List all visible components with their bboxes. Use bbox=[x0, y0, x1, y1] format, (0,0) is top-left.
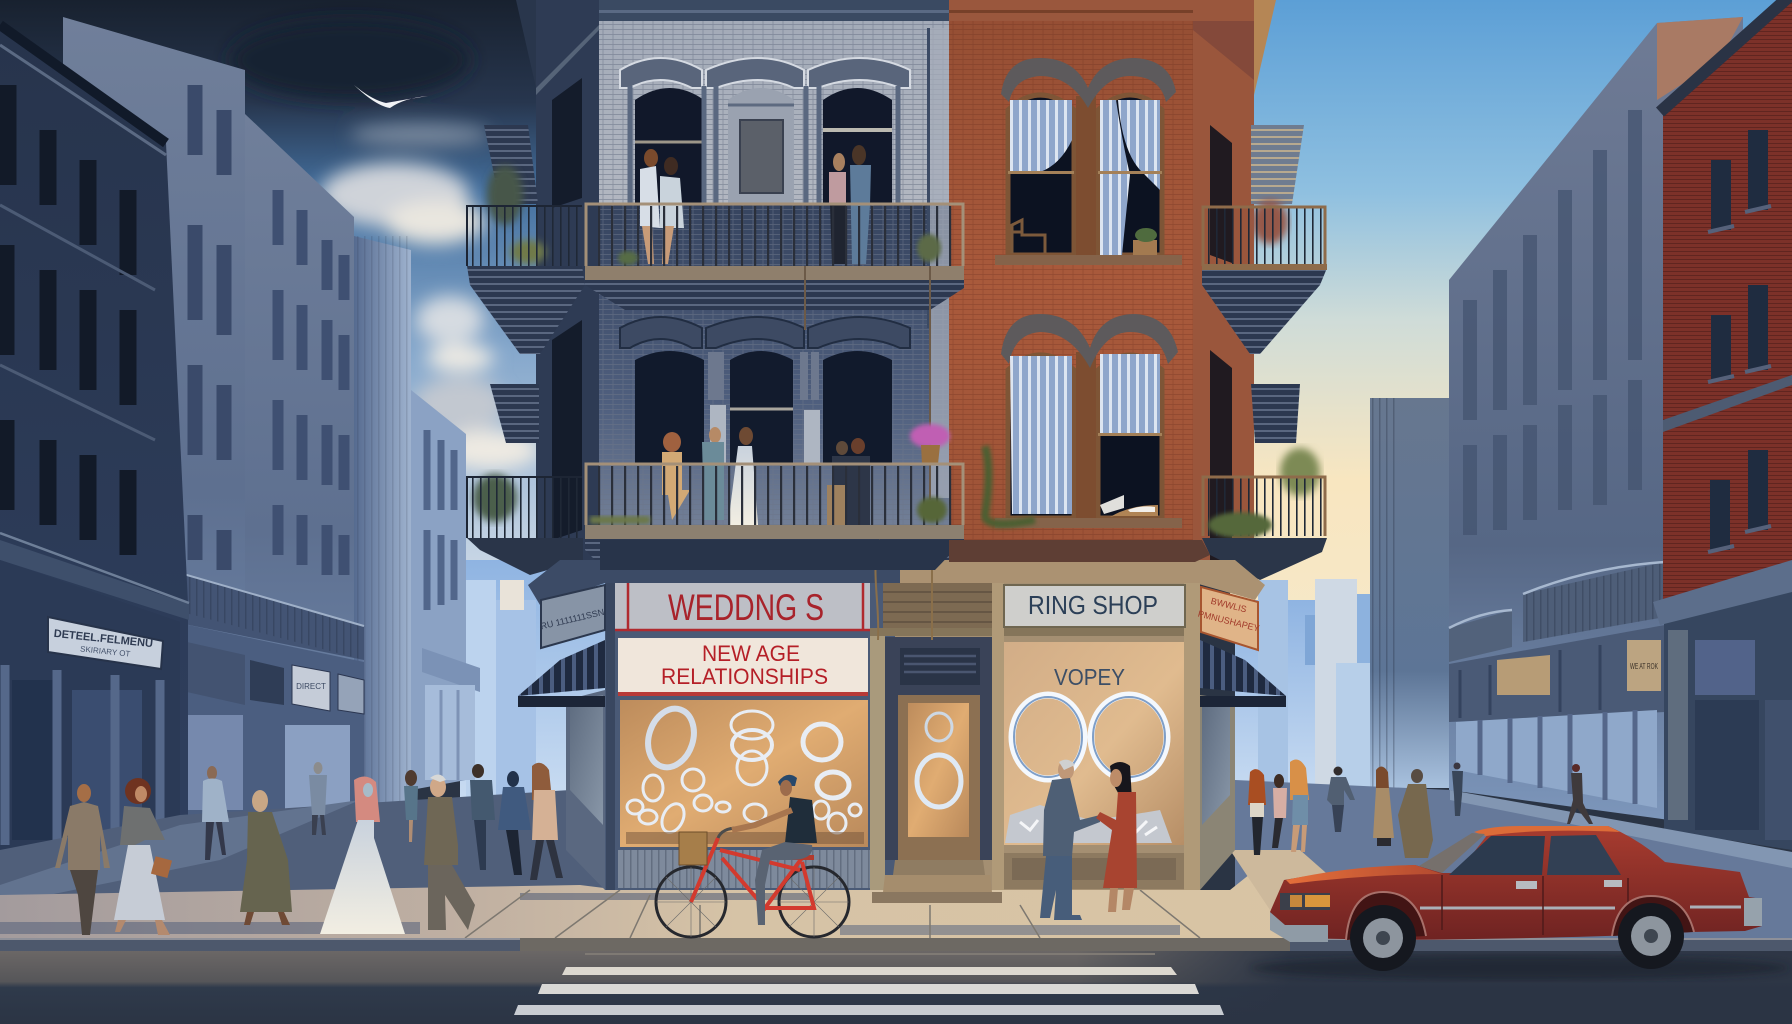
couple right bbox=[829, 145, 871, 264]
cornice right bbox=[900, 560, 1265, 600]
sign: weddings bbox=[615, 583, 870, 630]
bicycle bbox=[656, 828, 849, 937]
car: red sedan bbox=[1250, 826, 1790, 980]
person: curly woman bbox=[114, 778, 172, 935]
mid building left C bbox=[245, 114, 354, 810]
person: hooded bbox=[498, 771, 531, 875]
icon: chair bbox=[1012, 220, 1045, 253]
gray upper door bbox=[728, 88, 794, 204]
window: ring shop bbox=[1004, 642, 1184, 845]
poster: torn bbox=[1497, 655, 1550, 695]
brick windows lower bbox=[985, 314, 1182, 528]
door handle front bbox=[1516, 881, 1537, 889]
person: pink top bbox=[1272, 774, 1287, 848]
person: bride bbox=[320, 776, 405, 934]
sign: old store: DETEEL.FELMENU bbox=[53, 628, 154, 650]
door handle rear bbox=[1604, 880, 1622, 887]
balcony railing bbox=[587, 466, 962, 525]
curtain lower left bbox=[1010, 356, 1072, 514]
poster: notice bbox=[1627, 640, 1661, 691]
hanging plants bbox=[985, 446, 1035, 524]
roof eaves bbox=[516, 0, 566, 88]
mid building storefront with balcony bbox=[159, 567, 364, 820]
balcony railing bbox=[587, 206, 962, 266]
rear wheel bbox=[1618, 903, 1684, 969]
person: beige coat bbox=[1373, 766, 1394, 846]
right side wall bbox=[1193, 0, 1254, 570]
mid building left B bbox=[63, 17, 245, 810]
icon: plant pot bbox=[1133, 228, 1157, 255]
person: coat bbox=[202, 766, 229, 860]
person: far dark bbox=[1452, 762, 1463, 816]
left side wall bbox=[536, 0, 599, 570]
gray upper window left bbox=[635, 88, 704, 204]
sign: left side bbox=[540, 585, 605, 648]
person: man blue jacket bbox=[470, 764, 495, 870]
hood bbox=[1286, 865, 1442, 884]
sky: stormy left bbox=[0, 0, 640, 640]
right building blue bbox=[1449, 17, 1743, 830]
side fire escape lower right bbox=[1202, 384, 1327, 580]
door steps bbox=[872, 860, 1002, 903]
person: old woman robe bbox=[240, 790, 292, 925]
railing bbox=[467, 206, 582, 266]
lower balcony bbox=[585, 424, 964, 565]
flowers bbox=[1252, 200, 1288, 244]
balcony floor bbox=[585, 266, 964, 280]
headlight bbox=[1280, 893, 1330, 910]
trim strip bbox=[1420, 907, 1741, 908]
side fire escape lower left bbox=[467, 384, 583, 575]
sign: right side: PMNUSHAPEY bbox=[1197, 609, 1261, 634]
far right tall building bbox=[1370, 398, 1450, 788]
person: far grey bbox=[309, 762, 327, 835]
front bumper bbox=[1270, 912, 1328, 942]
gray upper window right bbox=[823, 88, 892, 204]
poster: notice: WE AT ROK bbox=[1630, 662, 1658, 671]
curb bbox=[0, 938, 1792, 951]
group of three bbox=[662, 427, 758, 525]
window sill bbox=[995, 255, 1182, 265]
street left and right bbox=[0, 780, 1792, 940]
balcony: right long bbox=[1523, 562, 1665, 642]
roof bbox=[1474, 826, 1620, 836]
arches gray upper bbox=[620, 58, 910, 348]
shade across front bbox=[600, 540, 964, 570]
icon: seagull bbox=[354, 85, 428, 108]
road bbox=[0, 951, 1792, 1024]
far left dark building bbox=[0, 25, 189, 850]
sign: new age relationships: RELATIONSHIPS bbox=[661, 664, 828, 689]
flower pot bbox=[910, 424, 950, 464]
person: blonde bbox=[1290, 760, 1309, 852]
left facade base bbox=[605, 583, 895, 890]
cyclist and bicycle bbox=[656, 775, 849, 937]
upper balcony bbox=[585, 145, 964, 500]
background pedestrians left bbox=[202, 762, 563, 880]
sign: left side: RU 1111111SSN bbox=[540, 607, 605, 631]
sky: clear right bbox=[1230, 0, 1792, 640]
distant skyline right bbox=[1235, 579, 1375, 809]
side fire escape upper right bbox=[1202, 125, 1327, 354]
balcony underside bbox=[585, 280, 964, 310]
wood panel under window bbox=[1004, 853, 1184, 889]
hanging cords bbox=[875, 540, 932, 640]
underside bbox=[467, 266, 585, 354]
brick building right bbox=[1653, 0, 1792, 850]
front wheel bbox=[1350, 905, 1416, 971]
pedestrians foreground left bbox=[55, 774, 475, 935]
person: woman in red bbox=[1096, 762, 1137, 912]
clouds left bbox=[230, 20, 540, 470]
person: crossing bbox=[1567, 764, 1593, 824]
seated pair bbox=[827, 438, 870, 525]
icon: shoes bbox=[1100, 495, 1158, 517]
gray facade bbox=[599, 0, 949, 204]
person: long hair woman bbox=[530, 763, 563, 880]
window sill bbox=[995, 518, 1182, 528]
person: man far bbox=[1327, 766, 1355, 832]
balcony: right short bbox=[1449, 610, 1512, 662]
door bbox=[885, 637, 992, 860]
far building left tower bbox=[354, 236, 411, 810]
plants bbox=[487, 165, 546, 264]
brick windows upper bbox=[995, 58, 1182, 265]
sign: old store bbox=[48, 617, 163, 669]
sign: directory bbox=[292, 665, 330, 711]
sign: directory: DIRECT bbox=[296, 682, 326, 691]
rider bbox=[732, 775, 817, 925]
sign: right side bbox=[1197, 587, 1261, 650]
shopfront shutters bbox=[1456, 710, 1657, 808]
right angled wall bbox=[1200, 695, 1235, 890]
brick facade bbox=[949, 0, 1193, 570]
wood panel above door bbox=[870, 583, 1200, 636]
sign: new age relationships: NEW AGE bbox=[702, 641, 800, 666]
storefront blue right bbox=[1664, 567, 1792, 850]
curtain upper right bbox=[1100, 100, 1160, 190]
shop couple bbox=[1040, 760, 1137, 920]
sidewalk bbox=[0, 850, 1400, 940]
left angled wall bbox=[566, 690, 605, 890]
awning right bbox=[1200, 640, 1286, 707]
sign: ring shop bbox=[1004, 585, 1185, 627]
background pedestrians right bbox=[1248, 760, 1593, 858]
person: older man bbox=[1040, 760, 1100, 920]
pier bbox=[870, 630, 885, 890]
person: far child bbox=[404, 770, 418, 842]
body bbox=[1270, 826, 1762, 940]
corrugated panel bbox=[618, 850, 870, 888]
couple left bbox=[640, 149, 684, 264]
shop band bbox=[1449, 625, 1665, 722]
person: old man tan bbox=[424, 774, 475, 930]
rear bumper bbox=[1744, 898, 1762, 926]
sign: weddings: WEDDNG S bbox=[668, 587, 824, 628]
balcony underside bbox=[585, 539, 964, 565]
far building left annex bbox=[411, 390, 480, 790]
curtain upper left bbox=[1010, 100, 1072, 172]
front side window bbox=[1449, 836, 1545, 875]
windshield bbox=[1419, 833, 1485, 873]
person: hooded cloak bbox=[1398, 769, 1433, 858]
right facade base bbox=[895, 583, 1200, 890]
person: orange top bbox=[1248, 769, 1266, 855]
window: ring shop: VOPEY bbox=[1054, 664, 1125, 690]
wheel arches bbox=[1346, 892, 1694, 940]
sign: old store: SKIRIARY OT bbox=[80, 644, 131, 659]
sign: right side: BWWLIS bbox=[1210, 596, 1248, 614]
rear side window bbox=[1547, 835, 1621, 875]
window: wedding rings display bbox=[620, 700, 868, 847]
crosswalk stripes bbox=[514, 953, 1224, 1015]
gray lower windows bbox=[635, 351, 892, 464]
distant skyline left bbox=[460, 560, 640, 800]
person: suit man bbox=[55, 784, 110, 935]
balcony floor bbox=[585, 525, 964, 539]
awning left bbox=[518, 640, 605, 707]
cornice left bbox=[528, 560, 900, 605]
side fire escape upper left bbox=[467, 125, 585, 354]
curtain lower right bbox=[1100, 354, 1160, 434]
storefront bbox=[518, 540, 1286, 903]
saddle bbox=[792, 855, 814, 860]
sign: ring shop: RING SHOP bbox=[1028, 590, 1158, 620]
sun patches on lower facade bbox=[710, 405, 820, 465]
pier right bbox=[992, 583, 1004, 890]
stairs bbox=[484, 125, 538, 204]
sign: new age relationships bbox=[618, 638, 868, 696]
basket bbox=[679, 832, 707, 865]
car shadow bbox=[1250, 956, 1790, 980]
door lines bbox=[1442, 875, 1628, 935]
